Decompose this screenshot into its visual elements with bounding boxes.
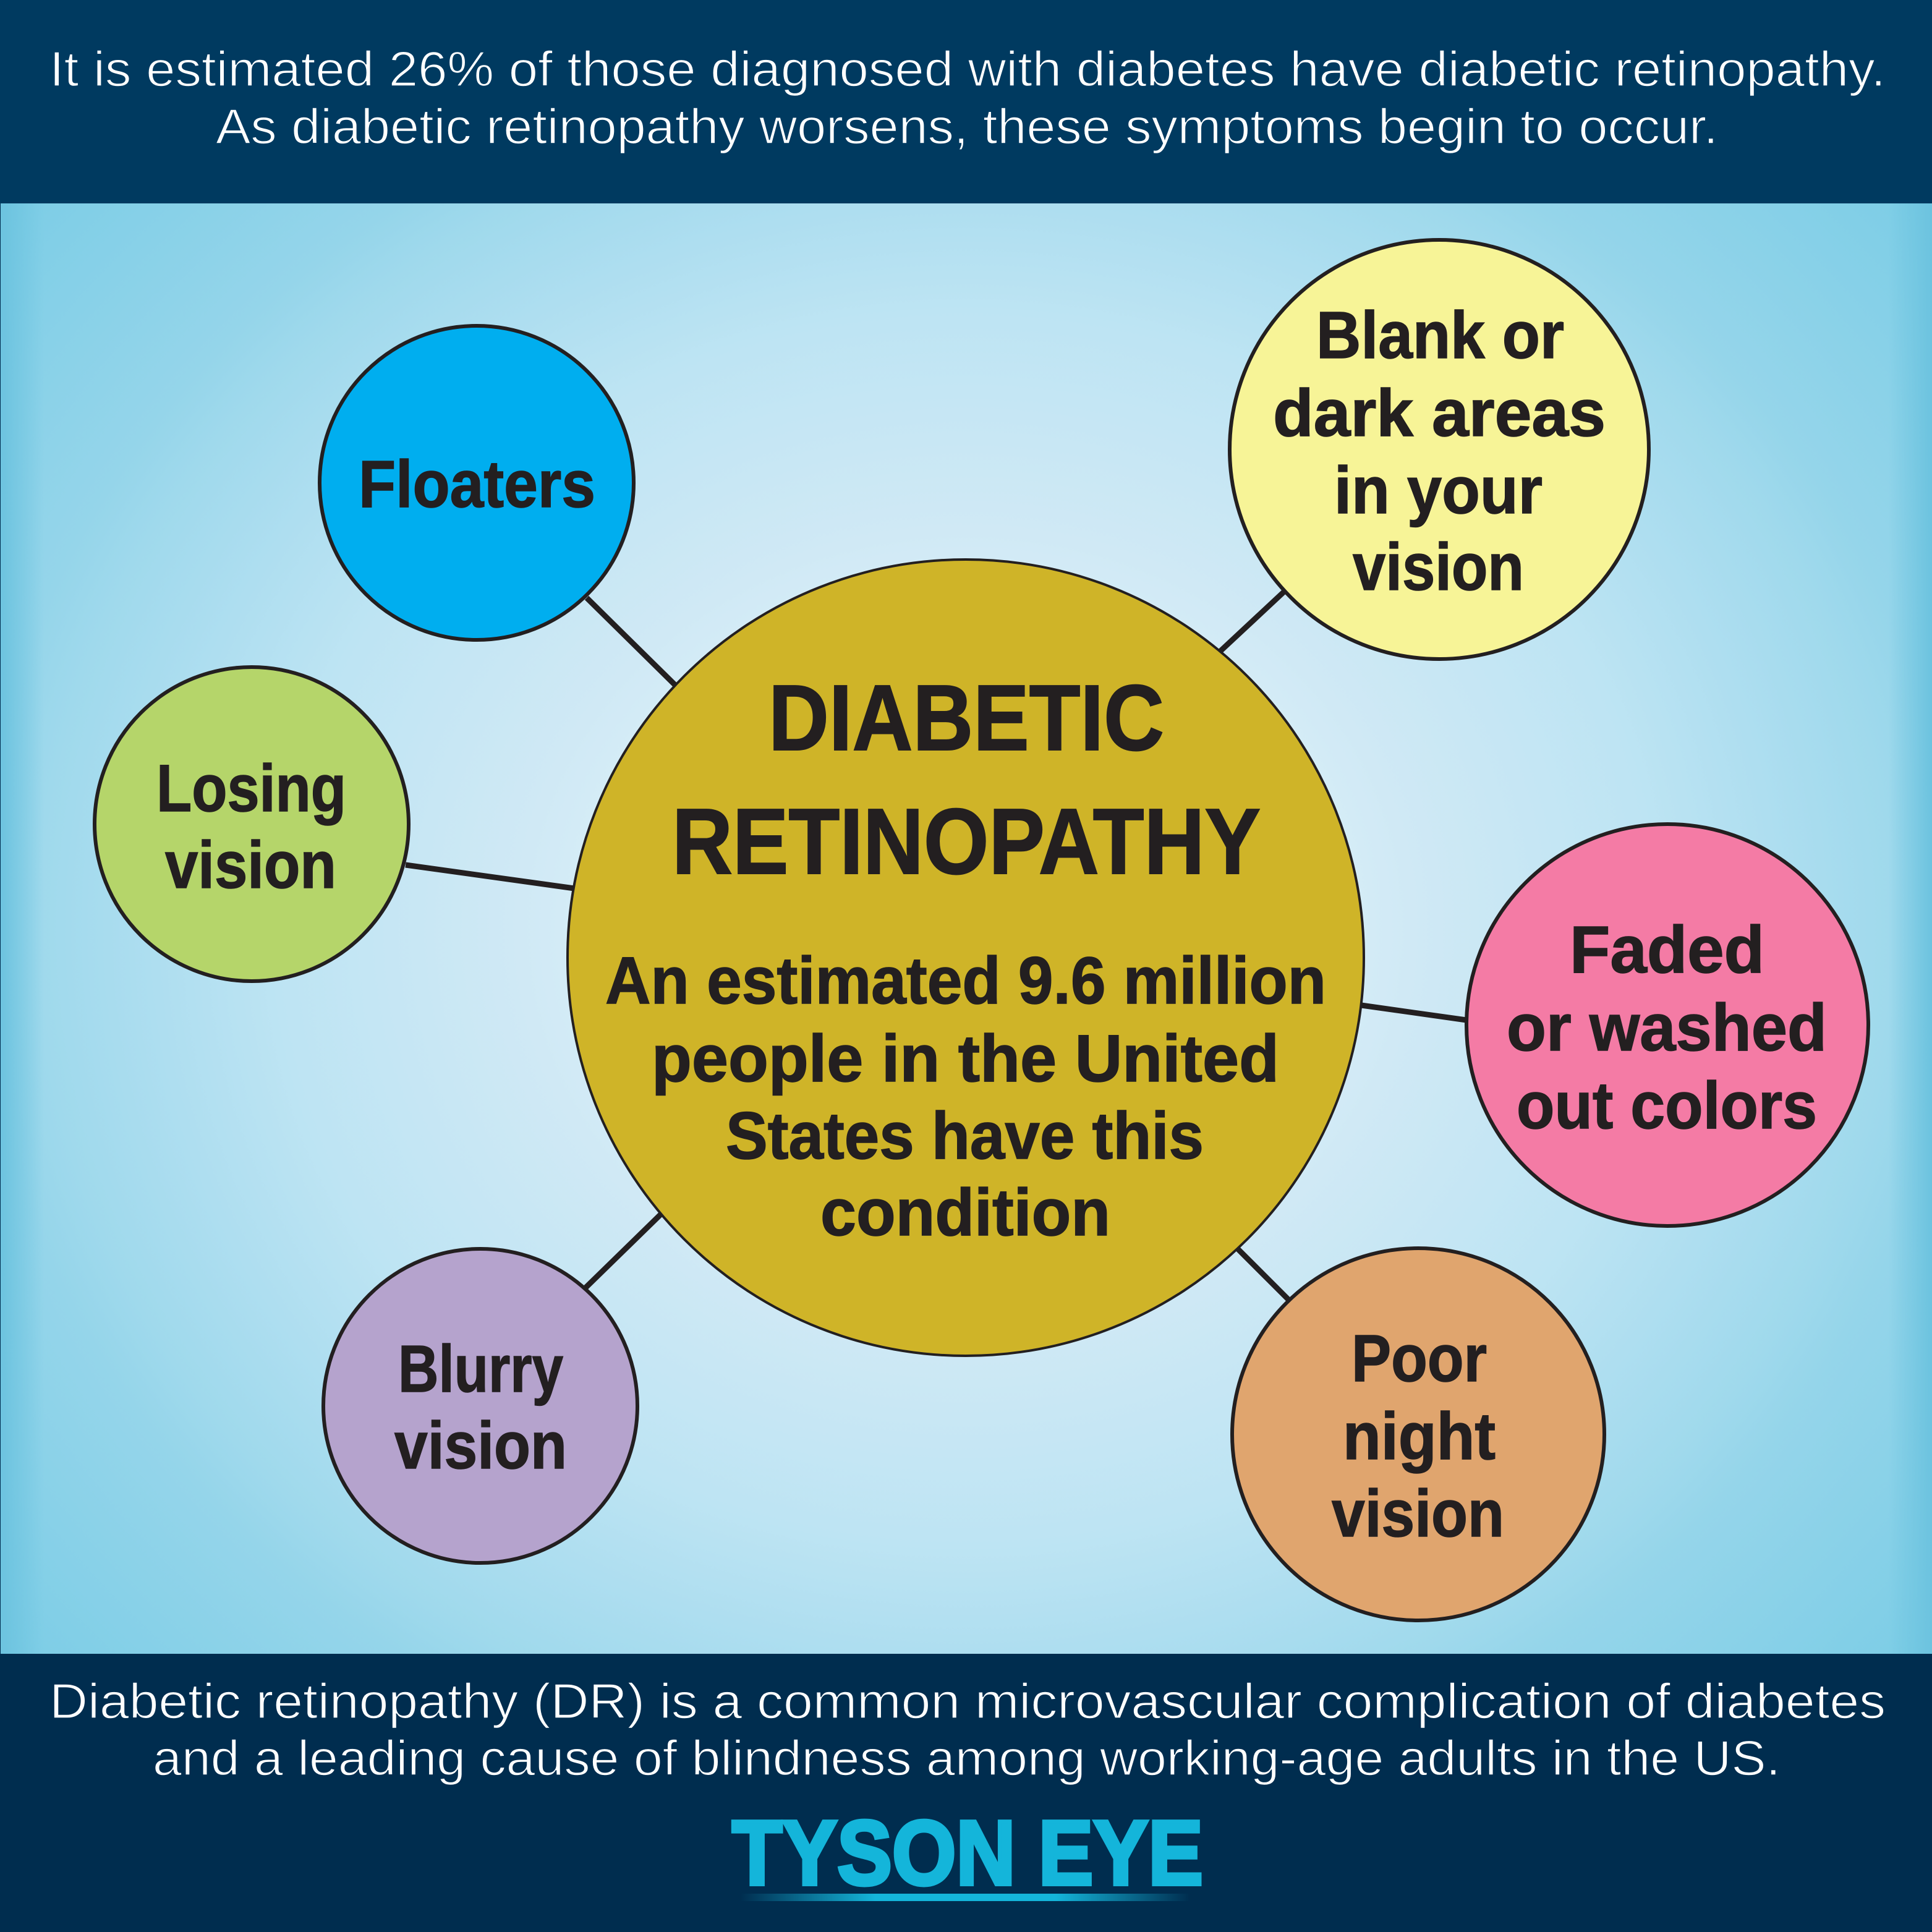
central circle: diabetic retinopathy [568,560,1364,1356]
symptom circle: floaters: Floaters [359,446,595,521]
symptom circle: faded or washed out colors: out colors [1517,1068,1817,1143]
symptom circle: blank or dark areas: Blank or [1316,297,1564,372]
symptom circle: losing vision: vision [165,827,336,902]
symptom circle: blank or dark areas: dark areas [1273,375,1606,450]
symptom circle: blurry vision: Blurry [398,1331,563,1406]
central circle: diabetic retinopathy: RETINOPATHY [672,789,1261,893]
central circle: diabetic retinopathy: condition [820,1175,1110,1249]
bottom banner: and a leading cause of blindness among working-age adults in the US. [153,1730,1781,1785]
symptom circle: losing vision [95,667,409,981]
symptom circle: poor night vision [1232,1248,1604,1620]
top banner [0,0,1932,203]
central circle: diabetic retinopathy: An estimated 9.6 million [605,943,1326,1018]
symptom circle: faded or washed out colors: or washed [1507,990,1827,1065]
symptom circle: blank or dark areas [1230,240,1649,659]
central circle: diabetic retinopathy: people in the United [652,1021,1279,1096]
symptom circle: poor night vision: night [1343,1398,1496,1473]
top banner: It is estimated 26% of those diagnosed with diabetes have diabetic retinopathy. [49,41,1886,96]
symptom circle: poor night vision: Poor [1351,1321,1487,1395]
symptom circle: floaters [320,326,634,640]
logo: Tyson Eye: TYSON EYE [732,1802,1203,1904]
symptom circle: blank or dark areas: in your [1334,453,1543,527]
symptom circle: blank or dark areas: vision [1353,529,1524,604]
symptom circle: losing vision: Losing [156,751,346,825]
background panel [1,203,1932,1654]
symptom circle: blurry vision: vision [394,1408,567,1483]
symptom circle: faded or washed out colors: Faded [1570,912,1764,987]
symptom circle: blurry vision [323,1249,637,1563]
symptom circle: faded or washed out colors [1466,824,1868,1226]
top banner: As diabetic retinopathy worsens, these symptoms begin to occur. [216,99,1718,154]
bottom banner: Diabetic retinopathy (DR) is a common microvascular complication of diabetes [49,1674,1886,1729]
central circle: diabetic retinopathy: States have this [726,1098,1204,1173]
connector lines [406,592,1466,1300]
bottom banner [0,1654,1932,1932]
central circle: diabetic retinopathy: DIABETIC [768,665,1164,770]
symptom circle: poor night vision: vision [1332,1476,1504,1551]
